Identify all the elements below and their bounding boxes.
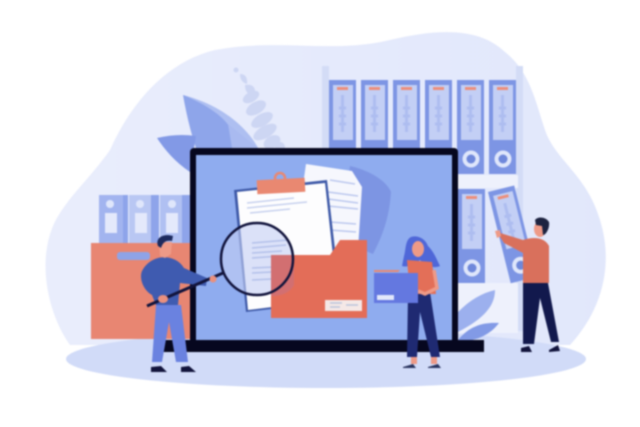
- magnifier lens: [221, 223, 293, 295]
- binders bottom row: [458, 185, 537, 283]
- background blob: [46, 32, 606, 345]
- man reaching to shelf: [495, 218, 560, 352]
- laptop: [163, 148, 484, 352]
- small plant right of laptop: [458, 290, 499, 341]
- back folder with binders: [91, 195, 191, 339]
- fern plant: [234, 68, 285, 152]
- magnified text lines: [252, 240, 288, 280]
- man with magnifier: [141, 235, 223, 372]
- clipboard with page: [234, 173, 336, 312]
- magnifier ring: [221, 223, 293, 295]
- red folder: [271, 240, 367, 318]
- woman holding folder: [374, 236, 441, 368]
- shelf uprights and boards: [322, 66, 523, 333]
- binders top row: [329, 80, 516, 174]
- ground ellipse: [66, 330, 586, 388]
- large leaves: [157, 95, 258, 172]
- document behind: [304, 164, 391, 254]
